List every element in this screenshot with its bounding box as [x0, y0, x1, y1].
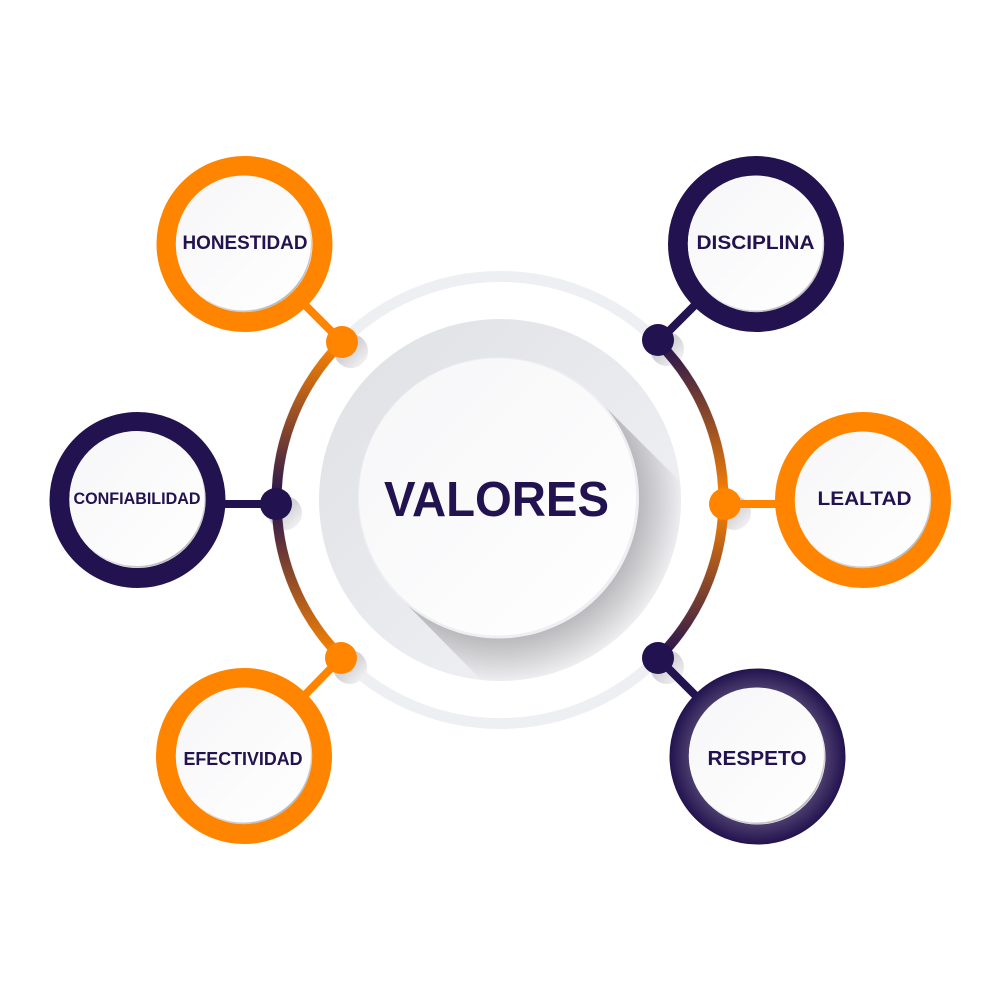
center hub: [319, 319, 700, 700]
inner face: [689, 688, 824, 822]
dot: [642, 642, 674, 674]
dot shadows: [268, 332, 751, 684]
label: LEALTAD: [818, 488, 912, 510]
infographic: valores: [50, 156, 951, 844]
inner face: [176, 176, 311, 310]
connector: [658, 658, 700, 700]
label: HONESTIDAD: [182, 233, 308, 254]
right gradient arc: [658, 342, 723, 658]
dot: [709, 488, 741, 520]
inner edge: [688, 176, 824, 312]
ring: [785, 422, 941, 578]
node: lealtad: [709, 422, 941, 578]
inner edge: [689, 688, 825, 824]
hub rim: [358, 358, 639, 638]
label: EFECTIVIDAD: [184, 749, 302, 769]
inner edge: [69, 431, 206, 568]
inner face: [688, 176, 823, 310]
connector: [220, 500, 276, 508]
node: disciplina: [642, 166, 834, 356]
hub plate: [319, 319, 681, 681]
ring: [166, 678, 322, 834]
connector: [300, 658, 341, 700]
dot: [326, 326, 358, 358]
connector: [725, 500, 782, 508]
inner face: [795, 432, 930, 566]
ring: [60, 422, 216, 578]
connector: [300, 300, 342, 342]
hub long shadow: [406, 406, 677, 676]
inner face: [176, 688, 311, 822]
label: RESPETO: [708, 748, 806, 770]
connector: [658, 300, 700, 342]
node: confiabilidad: [60, 422, 292, 578]
inner face: [69, 431, 204, 566]
ring: [166, 166, 322, 322]
ring: [678, 166, 834, 322]
label: CONFIABILIDAD: [74, 490, 201, 508]
ring: [680, 678, 836, 834]
outer grey ring: [276, 276, 724, 724]
node: efectividad: [166, 642, 357, 834]
inner edge: [795, 432, 931, 568]
inner edge: [176, 688, 312, 824]
dot: [325, 642, 357, 674]
title: VALORES: [384, 473, 609, 527]
node: honestidad: [166, 166, 358, 358]
node: respeto: [642, 642, 836, 834]
inner edge: [176, 176, 312, 312]
left gradient arc: [277, 342, 342, 658]
dot: [642, 324, 674, 356]
dot: [260, 488, 292, 520]
label: DISCIPLINA: [696, 232, 814, 254]
hub face: [359, 358, 636, 636]
